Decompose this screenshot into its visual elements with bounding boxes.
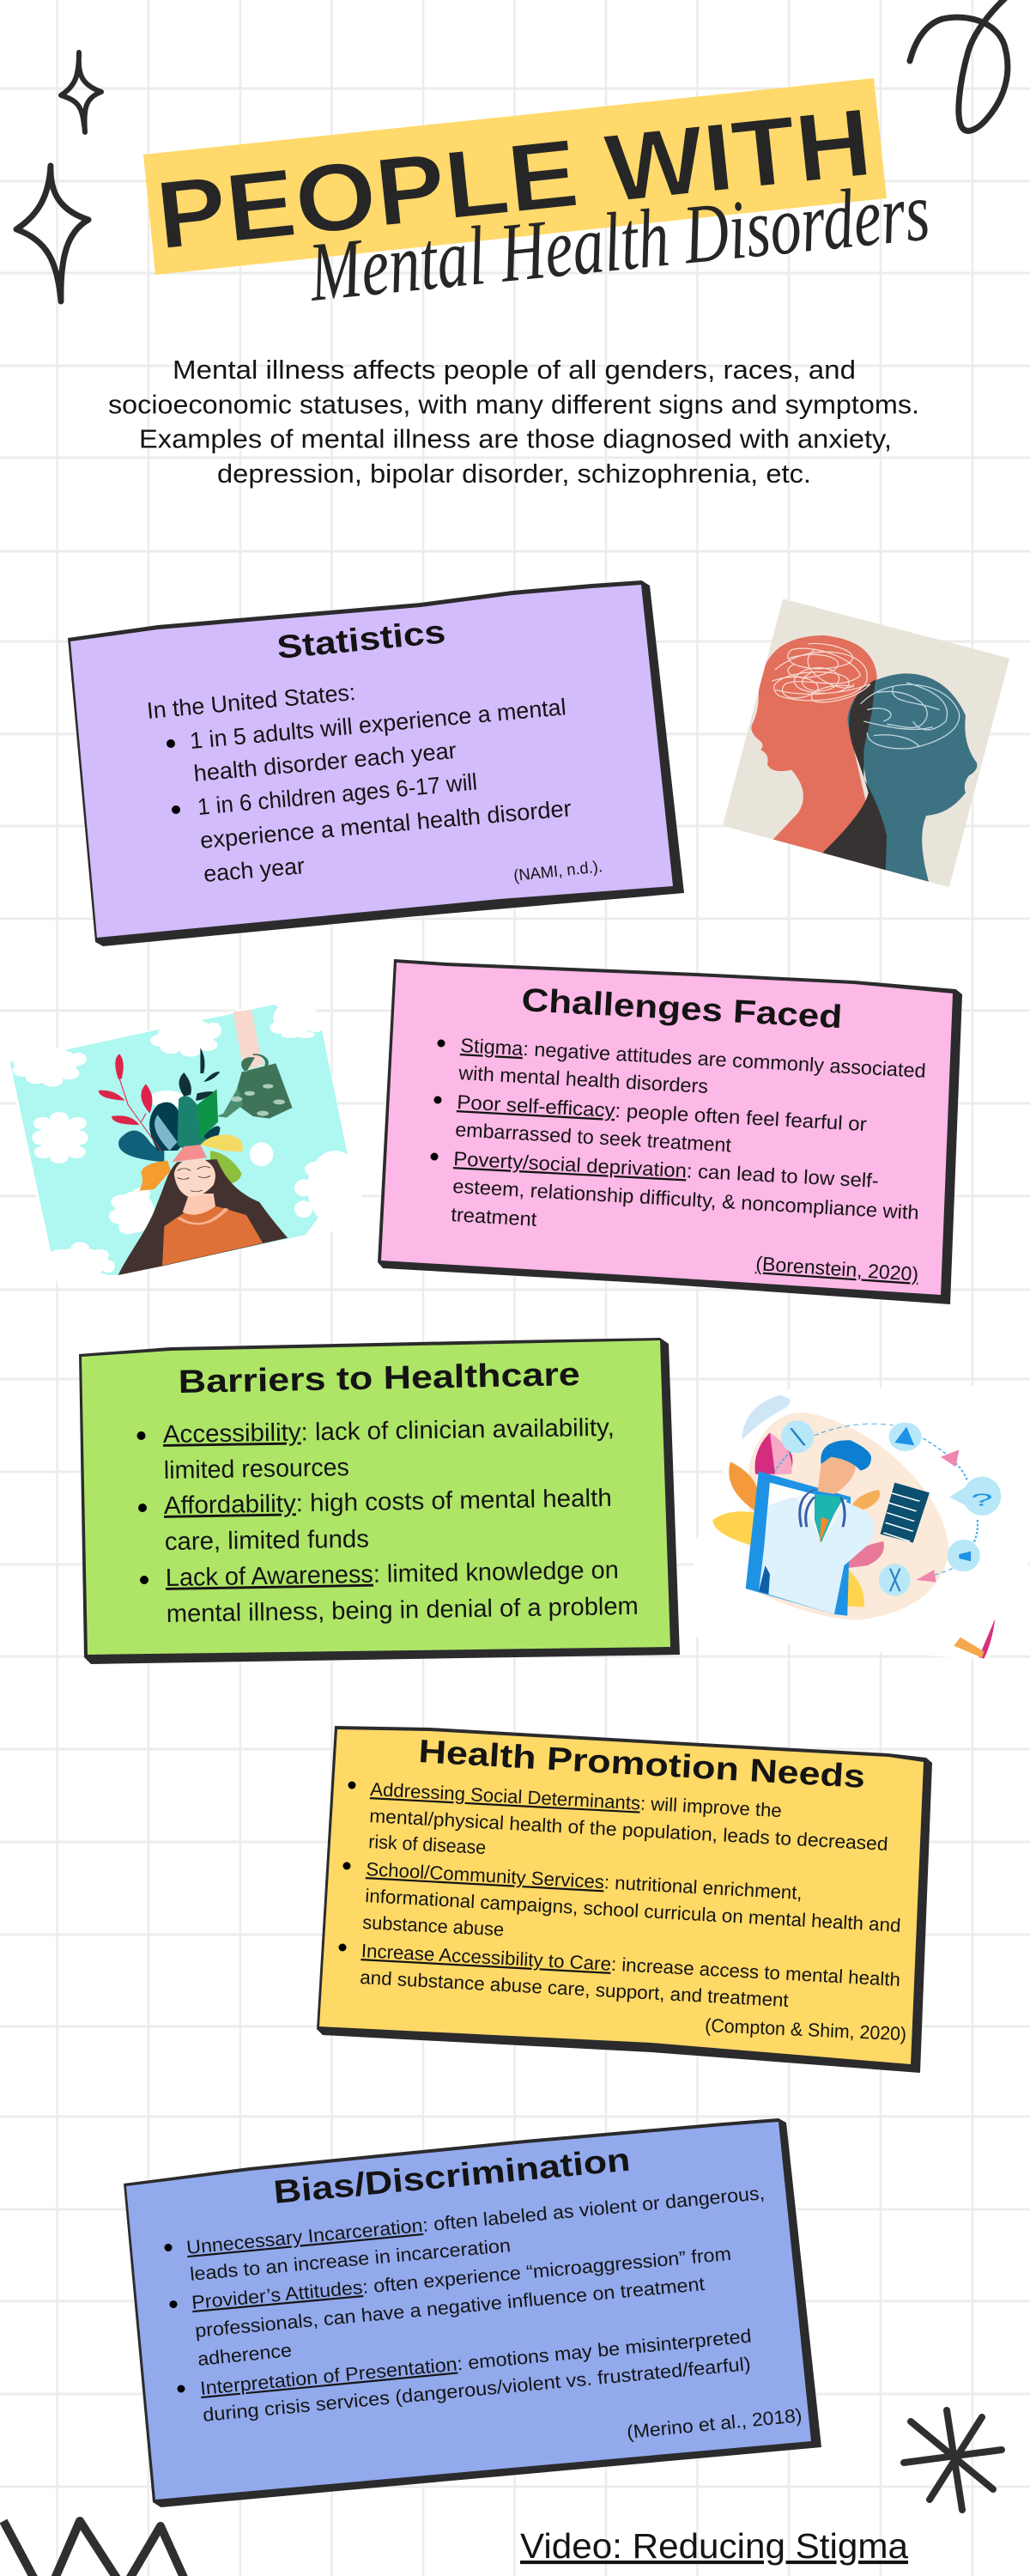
medical icons [781, 1420, 1001, 1596]
bullet list: mental illness, being in denial of a problem [167, 1593, 639, 1628]
heading: Health Promotion Needs [417, 1734, 866, 1795]
icon: asterisk [904, 2410, 1002, 2510]
card background [378, 959, 962, 1304]
body text: In the United States: [146, 679, 357, 724]
peach blob [748, 1413, 949, 1620]
scribble brain [772, 643, 870, 702]
intro text [108, 355, 919, 489]
icon: squiggle top right [910, 0, 1008, 131]
bullet list: esteem, relationship difficulty, & noncompliance with [452, 1175, 919, 1224]
intro text: socioeconomic statuses, with many different signs and symptoms. [108, 390, 919, 419]
hand [233, 1010, 264, 1071]
bullet list: with mental health disorders [457, 1061, 709, 1097]
card background [124, 2118, 821, 2507]
body text [146, 679, 573, 887]
bullet list [338, 1778, 901, 2011]
card background [317, 1726, 932, 2073]
illustration: woman with plants [7, 1002, 362, 1288]
foliage [118, 1131, 164, 1162]
bullet list: Affordability: high costs of mental health [164, 1485, 612, 1520]
clouds [13, 1002, 362, 1277]
title highlight band [143, 78, 887, 275]
citation: (Compton & Shim, 2020) [705, 2014, 907, 2044]
heading: Statistics [276, 614, 447, 666]
bullet list: leads to an increase in incarceration [189, 2234, 512, 2285]
bullet list: during crisis services (dangerous/violent vs. frustrated/fearful) [202, 2353, 752, 2426]
white patch [693, 1385, 1030, 1660]
small leaf corner [978, 1619, 995, 1659]
door panel [746, 1471, 851, 1616]
panel: statistics [68, 580, 684, 946]
panel: barriers to healthcare [79, 1338, 680, 1664]
cyan background [9, 1005, 351, 1275]
bullet list: treatment [451, 1203, 538, 1230]
intro text: Examples of mental illness are those diagnosed with anxiety, [139, 424, 892, 453]
bullet list: Unnecessary Incarceration : often labeled as violent or dangerous, [185, 2182, 766, 2258]
heading: Challenges Faced [521, 982, 843, 1036]
bullet list: Lack of Awareness: limited knowledge on [166, 1557, 619, 1592]
bullet list: informational campaigns, school curricula on mental health and [365, 1885, 901, 1936]
title line: people with: PEOPLE WITH [151, 88, 876, 270]
leaves [742, 1395, 791, 1440]
illustration: doctor with medical icons: ? [971, 1490, 993, 1510]
bullet list: substance abuse [362, 1911, 505, 1941]
bullet list: Poor self-efficacy : people often feel fearful or [457, 1091, 868, 1135]
shirt [162, 1206, 263, 1266]
body text: 1 in 5 adults will experience a mental [189, 694, 567, 754]
bullet list: Accessibility: lack of clinician availability, [163, 1414, 615, 1449]
body text: 1 in 6 children ages 6-17 will [197, 769, 478, 820]
bullet list: mental/physical health of the population, leads to decreased [369, 1805, 888, 1855]
watering can [233, 1057, 293, 1119]
body text: health disorder each year [192, 738, 457, 787]
hair [118, 1159, 288, 1275]
citation: (NAMI, n.d.). [512, 858, 603, 885]
card background [68, 580, 684, 946]
arrows [941, 1449, 959, 1467]
icon: zigzag bottom left [3, 2521, 189, 2576]
bullet list: Increase Accessibility to Care: increase access to mental health [360, 1940, 901, 1990]
bullet list: care, limited funds [165, 1526, 369, 1556]
stethoscope [800, 1490, 845, 1527]
bullet list: embarrassed to seek treatment [455, 1118, 732, 1157]
bullet list: and substance abuse care, support, and treatment [360, 1966, 789, 2011]
illustration: two heads with brains [723, 598, 1009, 893]
icon: large sparkle [16, 166, 88, 301]
video link: Video: Reducing Stigma [520, 2526, 908, 2566]
bullet list: Addressing Social Determinants: will improve the [370, 1778, 782, 1821]
panel: bias and discrimination [124, 2118, 821, 2507]
face [183, 1194, 215, 1215]
citation: (Borenstein, 2020) [755, 1252, 919, 1285]
bullet list: limited resources [164, 1454, 349, 1485]
icon: small sparkle [61, 52, 101, 132]
body text: each year [203, 853, 306, 887]
title [143, 78, 934, 319]
bullet list [137, 1414, 639, 1628]
illustration: doctor with medical icons [693, 1385, 1030, 1660]
bullet list: School/Community Services: nutritional enrichment, [366, 1858, 803, 1904]
bullet list: adherence [197, 2339, 293, 2370]
bullet list [165, 2182, 766, 2426]
bullet list [431, 1034, 926, 1230]
citation: (Merino et al., 2018) [626, 2404, 803, 2443]
card background [79, 1338, 680, 1664]
bullet list: risk of disease [368, 1831, 487, 1858]
teal head [847, 673, 977, 893]
body text: experience a mental health disorder [199, 795, 573, 854]
doctor coat [759, 1496, 875, 1614]
bullet list: Interpretation of Presentation : emotions may be misinterpreted [199, 2325, 753, 2399]
red head [751, 635, 882, 869]
bullet list: professionals, can have a negative influence on treatment [194, 2273, 706, 2342]
intro text: depression, bipolar disorder, schizophrenia, etc. [217, 459, 811, 489]
bullet list: Provider’s Attitudes : often experience “microaggression” from [191, 2243, 732, 2313]
dashed ring [775, 1424, 978, 1580]
overlap [822, 680, 887, 872]
bullet list: Stigma: negative attitudes are commonly associated [460, 1034, 926, 1082]
intro text: Mental illness affects people of all genders, races, and [173, 355, 856, 385]
white image backing [7, 1002, 358, 1288]
bullet list: Poverty/social deprivation : can lead to low self- [453, 1147, 879, 1192]
paper [881, 1483, 930, 1543]
panel: health promotion needs [317, 1726, 932, 2073]
heading: Bias/Discrimination [272, 2142, 632, 2211]
head [818, 1455, 855, 1494]
line brain [861, 683, 960, 749]
heading: Barriers to Healthcare [178, 1357, 580, 1400]
panel: challenges faced [378, 959, 962, 1304]
